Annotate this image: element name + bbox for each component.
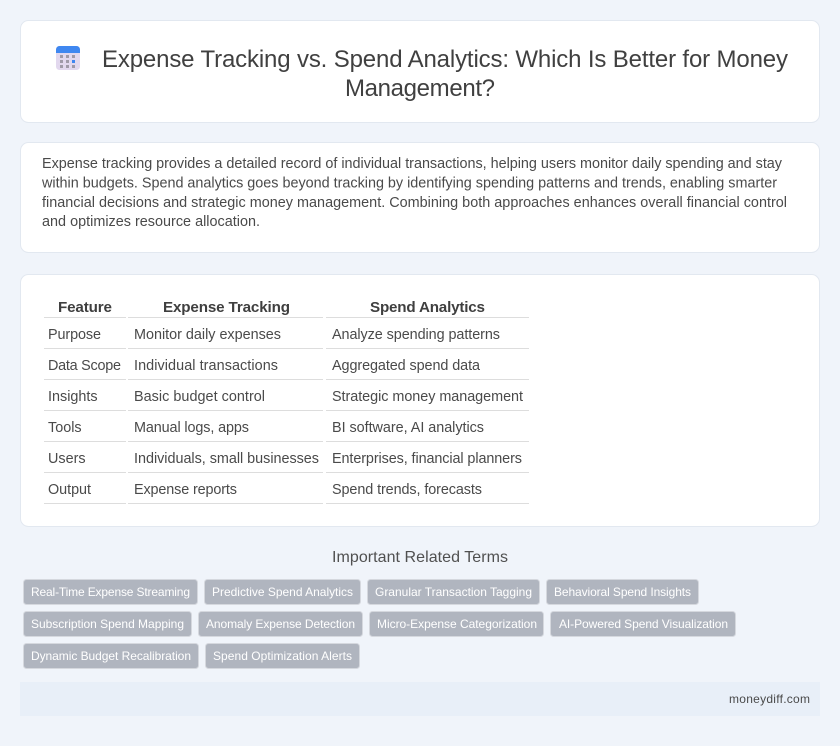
title: Management?: [345, 75, 495, 102]
row: Purpose: Purpose: [48, 327, 101, 343]
table header row: Expense Tracking: [163, 299, 290, 316]
row: Purpose: [48, 327, 500, 343]
row: Insights: Strategic money management: [332, 389, 523, 405]
row: Tools: BI software, AI analytics: [332, 420, 484, 436]
row: Data Scope: [48, 358, 480, 374]
panel: comparison table: [20, 274, 820, 526]
row: Data Scope: Data Scope: [48, 358, 121, 374]
chips: related terms: Anomaly Expense Detection: [206, 617, 355, 631]
footer: [20, 682, 820, 716]
row: Output: Output: [48, 482, 91, 498]
row: Output: Expense reports: [134, 482, 237, 498]
row: Insights: Insights: [48, 389, 98, 405]
row: Insights: Basic budget control: [134, 389, 265, 405]
row: Purpose: Analyze spending patterns: [332, 327, 500, 343]
row: Data Scope: Aggregated spend data: [332, 358, 480, 374]
row: Output: Spend trends, forecasts: [332, 482, 482, 498]
icon: calendar: [56, 46, 80, 70]
row: Users: [48, 451, 522, 467]
row: Tools: Manual logs, apps: [134, 420, 249, 436]
chips: related terms: Dynamic Budget Recalibration: [31, 649, 191, 663]
table header row: [58, 299, 485, 316]
panel: header: [20, 20, 820, 122]
row: Insights: [48, 389, 523, 405]
table header row: Spend Analytics: [370, 299, 485, 316]
row: Users: Individuals, small businesses: [134, 451, 319, 467]
chips: related terms: Predictive Spend Analytics: [212, 585, 353, 599]
chips: related terms: Subscription Spend Mapping: [31, 617, 184, 631]
row: Users: Users: [48, 451, 86, 467]
row: Data Scope: Individual transactions: [134, 358, 278, 374]
text block: summary paragraph: and optimizes resource allocation.: [42, 214, 260, 230]
row: Purpose: Monitor daily expenses: [134, 327, 281, 343]
footer source text: moneydiff.com: [729, 692, 810, 706]
chips: related terms: Behavioral Spend Insights: [554, 585, 691, 599]
chips: related terms: Granular Transaction Tagging: [375, 585, 532, 599]
heading: related terms: Important Related Terms: [332, 549, 508, 566]
chips: related terms: Real-Time Expense Streaming: [31, 585, 190, 599]
chips: related terms: Micro-Expense Categorization: [377, 617, 537, 631]
table header row: Feature: [58, 299, 112, 316]
chips: related terms: AI-Powered Spend Visualization: [559, 617, 728, 631]
row: Tools: [48, 420, 484, 436]
text block: summary paragraph: within budgets. Spend analytics goes beyond tracking by identifying spending patterns and trends, enabling smarter: [41, 176, 777, 192]
text block: summary paragraph: financial decisions and strategic money management. Combining both approaches enhances overall financial control: [42, 195, 787, 211]
chips: related terms: Spend Optimization Alerts: [213, 649, 352, 663]
row: Output: [48, 482, 482, 498]
row: Tools: Tools: [48, 420, 82, 436]
title: [102, 46, 788, 102]
title: Expense Tracking vs. Spend Analytics: Which Is Better for Money: [102, 46, 788, 73]
text block: summary paragraph: Expense tracking provides a detailed record of individual transactions, helping users monitor daily spending and stay: [42, 156, 783, 172]
text block: summary paragraph: [41, 156, 787, 230]
chips: related terms: [24, 580, 736, 668]
row: Users: Enterprises, financial planners: [332, 451, 522, 467]
panel: summary: [20, 142, 820, 252]
